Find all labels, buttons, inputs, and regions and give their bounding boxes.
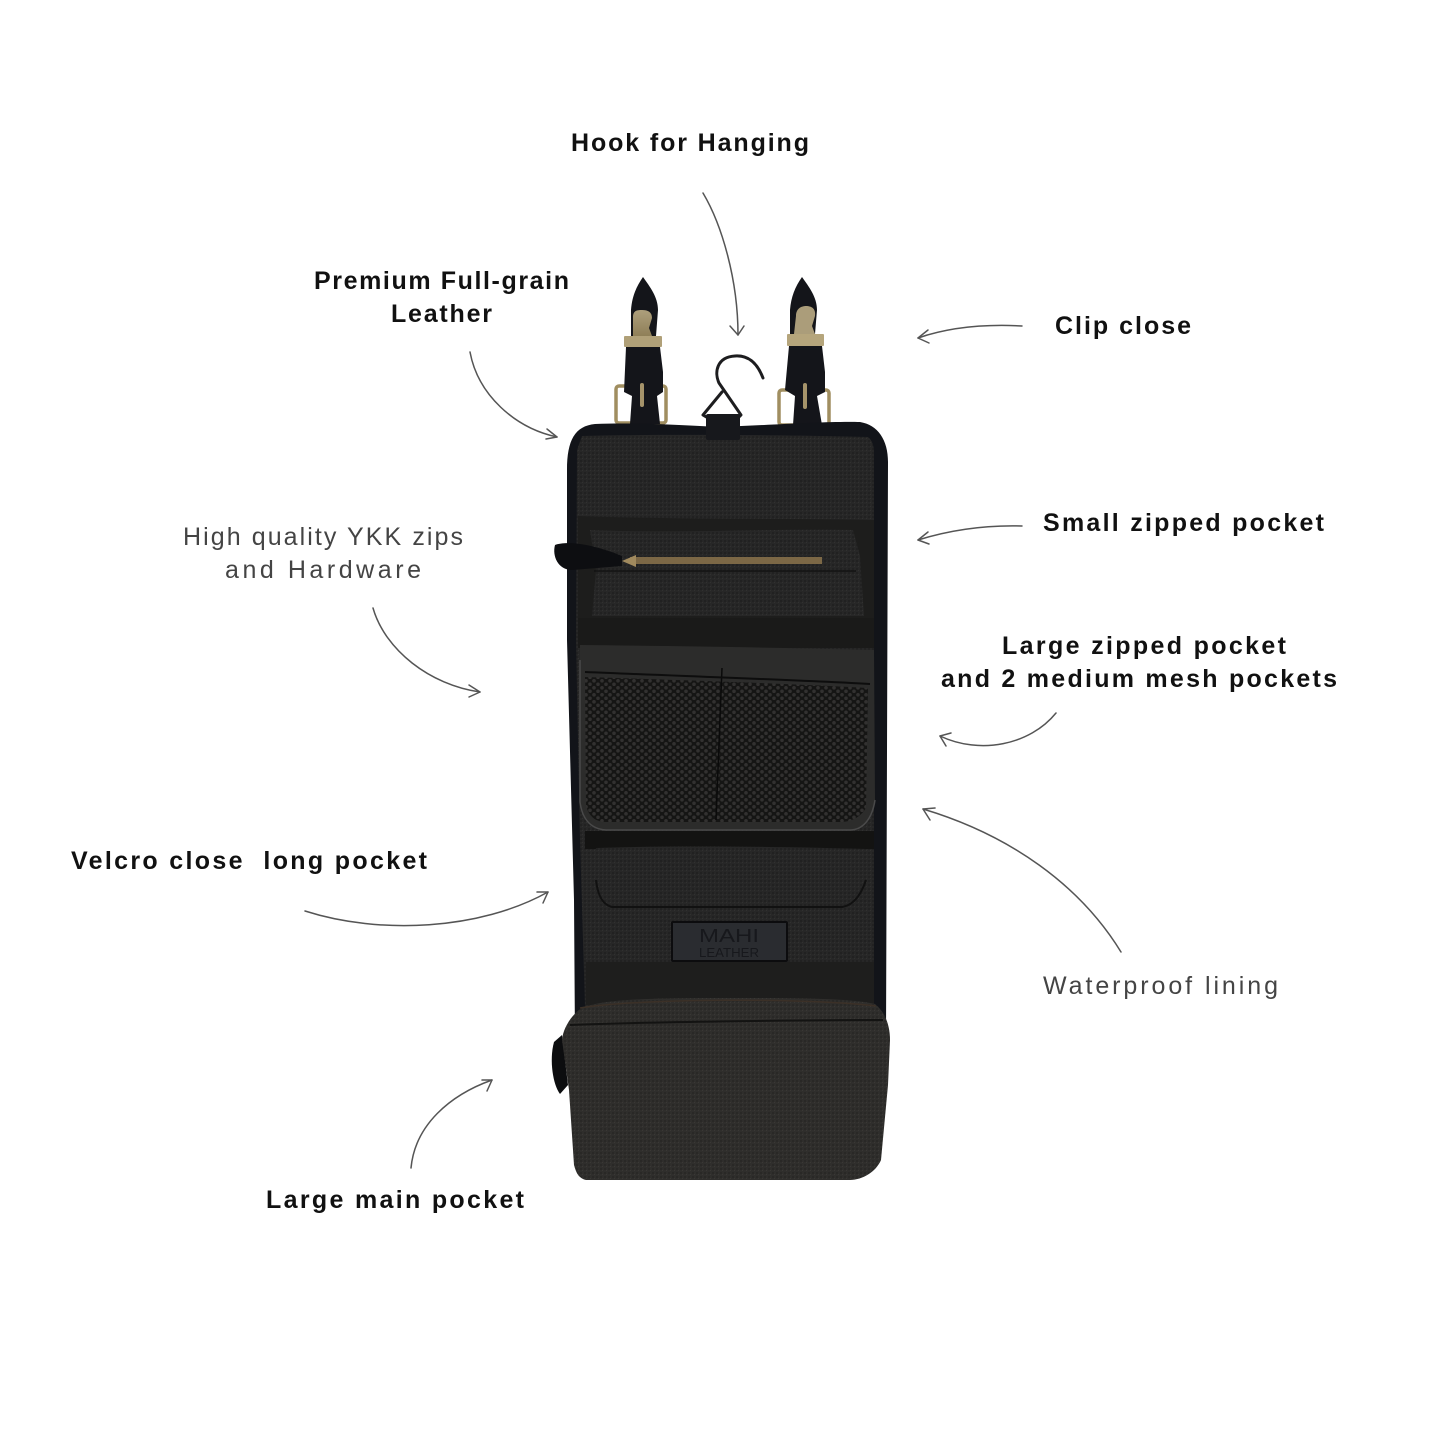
label: high quality YKK zips and hardware <box>183 523 463 584</box>
small zipped pocket <box>554 516 874 618</box>
arrow: velcro pocket <box>305 892 548 926</box>
product photo: hanging bag <box>552 277 890 1180</box>
label: clip close: Clip close <box>1055 312 1191 340</box>
label: premium full-grain leather <box>314 267 569 328</box>
zip pull tab <box>554 543 622 570</box>
side tab on main pocket <box>552 1035 568 1094</box>
label: large zipped pocket and mesh pockets: Large zipped pocket <box>1002 632 1287 660</box>
label: velcro close long pocket: Velcro close long pocket <box>71 847 428 875</box>
label: premium full-grain leather: Leather <box>391 300 492 328</box>
leather brand patch <box>672 922 787 961</box>
label: hook for hanging: Hook for Hanging <box>571 129 809 157</box>
main pocket <box>562 998 890 1180</box>
large zipped pocket with mesh <box>578 618 875 830</box>
lower lining fold <box>586 962 874 1005</box>
arrow: hook for hanging <box>703 193 744 335</box>
arrow: YKK zips <box>373 608 480 697</box>
lining <box>576 435 874 1040</box>
label: small zipped pocket: Small zipped pocket <box>1043 509 1325 537</box>
leather brand patch: LEATHER <box>699 945 759 960</box>
label: waterproof lining: Waterproof lining <box>1043 972 1278 1000</box>
arrow: waterproof lining <box>923 808 1121 952</box>
label: large zipped pocket and mesh pockets: and 2 medium mesh pockets <box>941 665 1337 693</box>
arrow: small zipped pocket <box>918 526 1022 544</box>
zip teeth <box>630 557 822 564</box>
left strap and clip <box>616 277 666 424</box>
label: high quality YKK zips and hardware: and Hardware <box>225 556 421 584</box>
hook tab <box>706 414 740 440</box>
leather brand patch: MAHI <box>699 926 759 946</box>
velcro long pocket <box>585 831 874 907</box>
hanging hook <box>703 356 763 418</box>
label: premium full-grain leather: Premium Full-grain <box>314 267 569 295</box>
bag body <box>567 422 888 1040</box>
arrow: large main pocket <box>411 1080 492 1168</box>
arrow: clip close <box>918 325 1022 343</box>
right strap and clip <box>779 277 829 425</box>
label: large main pocket: Large main pocket <box>266 1186 525 1214</box>
arrow: premium leather <box>470 352 557 439</box>
arrow: large zipped pocket <box>940 713 1056 746</box>
label: large zipped pocket and mesh pockets <box>941 632 1337 693</box>
label: high quality YKK zips and hardware: High quality YKK zips <box>183 523 463 551</box>
